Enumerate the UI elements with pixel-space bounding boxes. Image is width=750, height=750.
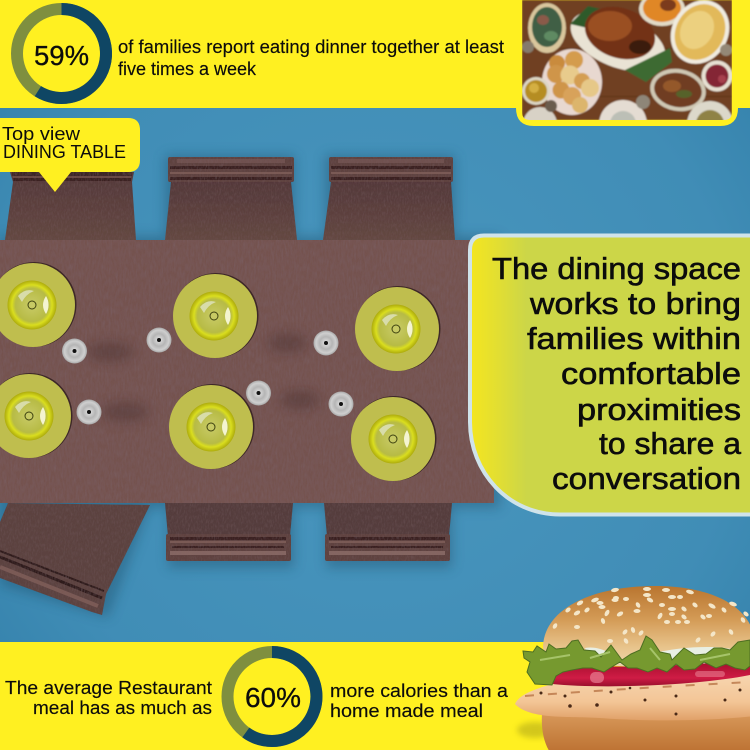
- bottom yellow band: [0, 642, 750, 750]
- panel: dining space message: families within: [527, 321, 741, 356]
- chicken fillet: [515, 674, 750, 720]
- place setting 2: [173, 273, 258, 358]
- text: families eating dinner statistic: [118, 36, 504, 79]
- text: average restaurant meal: meal has as much as: [33, 697, 212, 718]
- tomato slice: [552, 663, 750, 688]
- shadows under furniture: [0, 155, 500, 618]
- donut chart: 60%: [228, 652, 316, 741]
- place setting 6: [351, 396, 436, 481]
- text: more calories: home made meal: [330, 700, 483, 721]
- top bun with sesame: [543, 586, 750, 668]
- drinking glasses: [62, 328, 354, 424]
- text: average restaurant meal: The average Restaurant: [5, 677, 212, 698]
- panel: dining space message: proximities: [577, 392, 741, 427]
- place setting 5: [169, 384, 254, 469]
- donut chart: 60%: 60%: [245, 682, 301, 713]
- panel: dining space message: [470, 236, 750, 514]
- icon: chicken burger: [515, 586, 750, 750]
- callout: top view dining table: Top view: [2, 123, 81, 144]
- chair: top middle: [165, 157, 297, 240]
- donut chart: 59%: 59%: [34, 40, 89, 71]
- chair: top left: [5, 172, 136, 240]
- top yellow band: [0, 0, 750, 108]
- place setting 3: [355, 286, 440, 371]
- mayo: [585, 647, 735, 664]
- text: families eating dinner statistic: of families report eating dinner together at least: [118, 36, 504, 57]
- photo: holiday dinner spread: [516, 0, 738, 126]
- place setting 1: [0, 262, 76, 347]
- callout: top view dining table: [0, 118, 140, 192]
- shadows at table centre: [86, 334, 320, 421]
- chair: bottom right: [324, 503, 452, 561]
- panel: dining space message: The dining space: [492, 251, 741, 286]
- donut chart: 59%: [17, 9, 106, 98]
- text: average restaurant meal: [5, 677, 212, 718]
- bottom bun: [542, 712, 750, 750]
- panel: dining space message: to share a: [599, 426, 742, 461]
- text: more calories: more calories than a: [330, 680, 509, 701]
- lettuce: [523, 636, 750, 685]
- text: more calories: [330, 680, 509, 721]
- chair: bottom left, rotated: [0, 503, 150, 615]
- text: families eating dinner statistic: five times a week: [118, 58, 257, 79]
- chair: top right: [323, 157, 455, 240]
- table top: [0, 240, 494, 503]
- chair: bottom middle: [165, 503, 293, 561]
- panel: dining space message: comfortable: [561, 356, 741, 391]
- callout: top view dining table: DINING TABLE: [3, 141, 126, 162]
- dining table with chairs: [0, 155, 500, 618]
- panel: dining space message: conversation: [552, 461, 741, 496]
- panel: dining space message: works to bring: [529, 286, 741, 321]
- place setting 4: [0, 373, 72, 458]
